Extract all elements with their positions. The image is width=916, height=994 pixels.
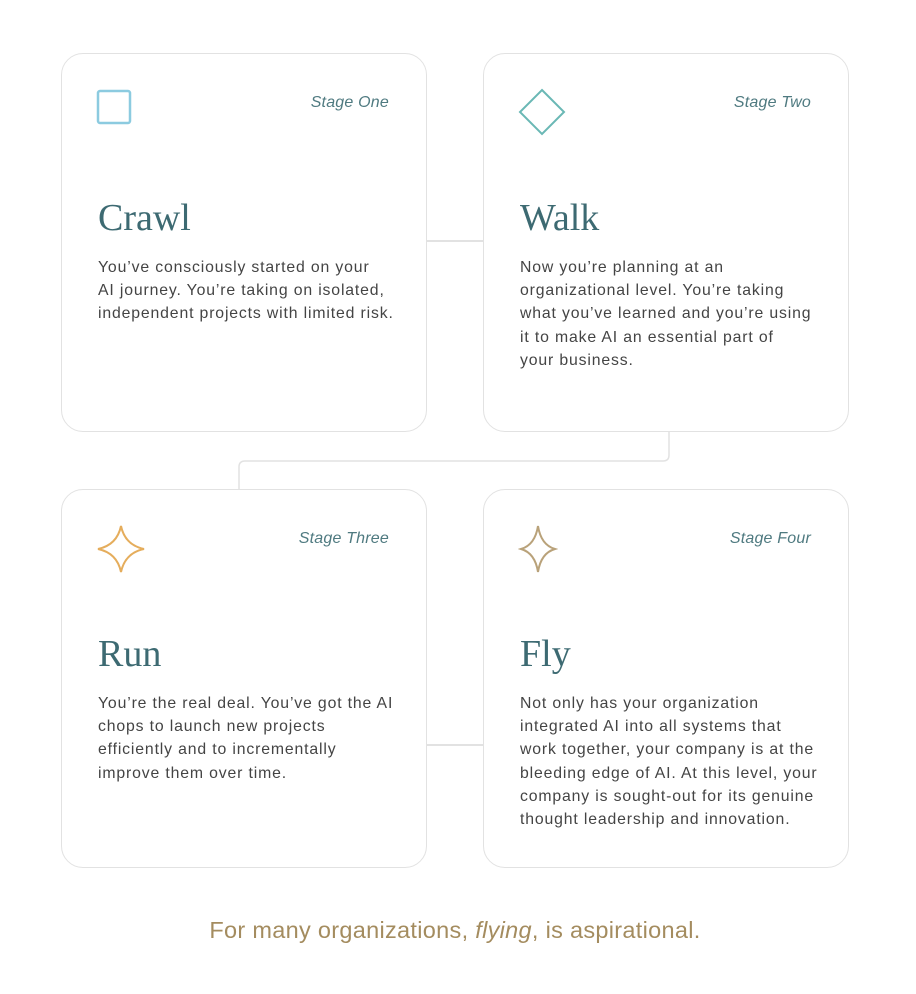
text block: integrated AI into all systems that — [520, 718, 782, 735]
text block: Now you’re planning at an — [520, 259, 724, 276]
panel: walk — [483, 53, 849, 432]
panel: fly — [483, 489, 849, 868]
panel: crawl — [61, 53, 427, 432]
text block — [98, 695, 393, 782]
stage label: Stage One — [311, 94, 389, 111]
text block: efficiently and to incrementally — [98, 741, 337, 758]
text block: bleeding edge of AI. At this level, your — [520, 765, 817, 782]
text block: it to make AI an essential part of — [520, 329, 774, 346]
text block: company is sought-out for its genuine — [520, 788, 814, 805]
text block: chops to launch new projects — [98, 718, 326, 735]
panel: run — [61, 489, 427, 868]
text block: Not only has your organization — [520, 695, 759, 712]
text block: your business. — [520, 352, 634, 369]
text block: organizational level. You’re taking — [520, 282, 784, 299]
text block: You’ve consciously started on your — [98, 259, 370, 276]
text block: You’re the real deal. You’ve got the AI — [98, 695, 393, 712]
text block: work together, your company is at the — [520, 741, 814, 758]
text block — [520, 259, 811, 369]
stage label: Stage Two — [734, 94, 811, 111]
text block: what you’ve learned and you’re using — [520, 305, 811, 322]
text block: AI journey. You’re taking on isolated, — [98, 282, 385, 299]
text block — [98, 259, 394, 322]
heading: Walk — [520, 197, 599, 239]
text block: thought leadership and innovation. — [520, 811, 790, 828]
heading: Fly — [520, 633, 571, 675]
icon: star — [518, 526, 558, 572]
icon: star — [98, 526, 144, 572]
text block — [520, 695, 817, 828]
icon: diamond — [518, 88, 566, 136]
connector: run to fly — [426, 744, 484, 746]
stage label: Stage Three — [299, 530, 389, 547]
text block: independent projects with limited risk. — [98, 305, 394, 322]
stage label: Stage Four — [730, 530, 811, 547]
icon: square — [96, 90, 132, 124]
footer caption: For many organizations, flying, is aspirational. — [209, 917, 701, 943]
heading: Run — [98, 633, 161, 675]
connector: crawl to walk — [426, 240, 484, 242]
heading: Crawl — [98, 197, 191, 239]
text block: improve them over time. — [98, 765, 287, 782]
